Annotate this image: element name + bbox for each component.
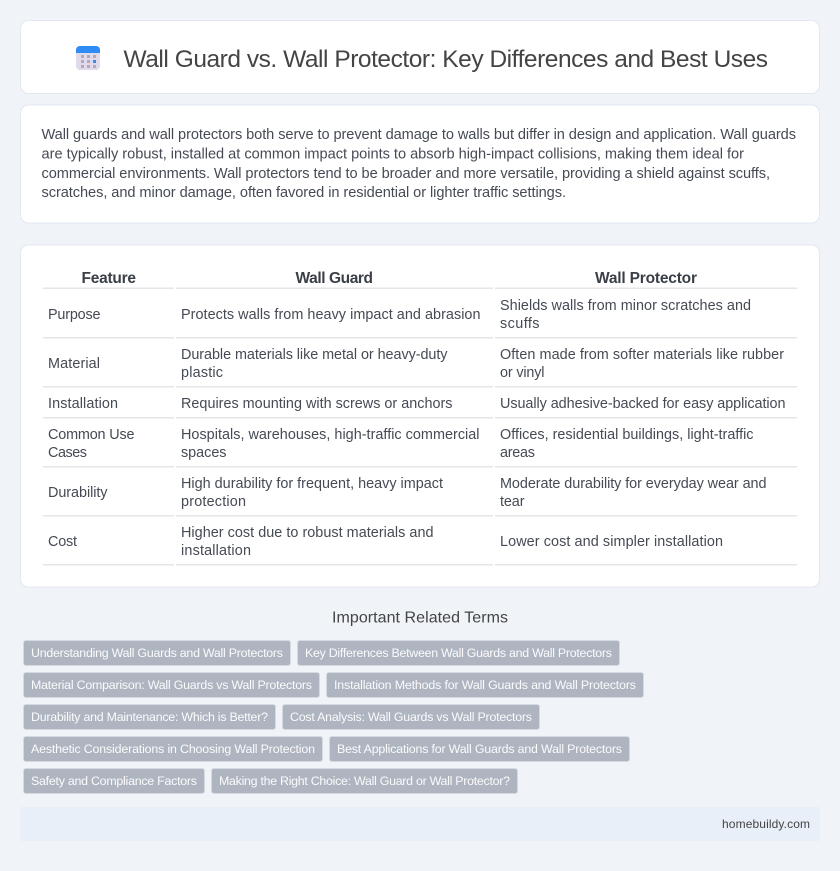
table header: Wall Protector bbox=[595, 270, 697, 287]
row: durability: tear bbox=[500, 494, 525, 510]
intro text: are typically robust, installed at common impact points to absorb high-impact collisions, making them ideal for bbox=[42, 146, 744, 162]
row: cost: Higher cost due to robust materials and bbox=[181, 525, 434, 541]
row: common use cases: areas bbox=[500, 445, 535, 461]
row: installation bbox=[48, 396, 786, 412]
row: common use cases bbox=[48, 427, 754, 461]
tag bbox=[330, 736, 630, 762]
related term tags bbox=[24, 640, 644, 794]
tag bbox=[282, 704, 540, 730]
row: material: Material bbox=[48, 356, 100, 372]
tag bbox=[24, 640, 290, 666]
tag bbox=[212, 768, 518, 794]
tag bbox=[298, 640, 620, 666]
row: durability: protection bbox=[181, 494, 246, 510]
heading: important related terms: Important Related Terms bbox=[332, 610, 508, 626]
icon: calendar bbox=[76, 46, 100, 70]
footer: homebuildy.com bbox=[722, 817, 810, 831]
row: purpose: Purpose bbox=[48, 307, 100, 323]
tag: Aesthetic Considerations in Choosing Wall Protection bbox=[31, 742, 315, 756]
intro text bbox=[42, 127, 796, 201]
row: purpose: scuffs bbox=[500, 316, 540, 332]
row: durability: High durability for frequent, heavy impact bbox=[181, 476, 443, 492]
table header: Wall Guard bbox=[296, 270, 373, 287]
row: material: Durable materials like metal or heavy-duty bbox=[181, 347, 448, 363]
row: common use cases: Hospitals, warehouses, high-traffic commercial bbox=[181, 427, 480, 443]
row: material: or vinyl bbox=[500, 365, 544, 381]
tag: Making the Right Choice: Wall Guard or Wall Protector? bbox=[219, 774, 510, 788]
tag: Key Differences Between Wall Guards and Wall Protectors bbox=[305, 646, 612, 660]
tag: Durability and Maintenance: Which is Better? bbox=[31, 710, 268, 724]
row: cost: Lower cost and simpler installation bbox=[500, 534, 723, 550]
tag: Understanding Wall Guards and Wall Protectors bbox=[31, 646, 283, 660]
row: purpose bbox=[48, 298, 751, 332]
table header: Feature bbox=[82, 270, 136, 287]
tag bbox=[24, 704, 276, 730]
row: durability bbox=[48, 476, 766, 510]
table header bbox=[82, 270, 697, 287]
tag bbox=[24, 768, 204, 794]
row: purpose: Shields walls from minor scratches and bbox=[500, 298, 751, 314]
tag bbox=[326, 672, 644, 698]
row: common use cases: Cases bbox=[48, 445, 87, 461]
row: durability: Moderate durability for everyday wear and bbox=[500, 476, 766, 492]
intro text: Wall guards and wall protectors both serve to prevent damage to walls but differ in design and application. Wall guards bbox=[42, 127, 796, 143]
row: purpose: Protects walls from heavy impact and abrasion bbox=[181, 307, 480, 323]
intro text: commercial environments. Wall protectors tend to be broader and more versatile, providing a shield against scuffs, bbox=[42, 166, 770, 182]
row: material: plastic bbox=[181, 365, 223, 381]
tag bbox=[24, 736, 322, 762]
row: installation: Usually adhesive-backed for easy application bbox=[500, 396, 786, 412]
panel: comparison table bbox=[20, 245, 820, 587]
row: material bbox=[48, 347, 784, 381]
title: Wall Guard vs. Wall Protector: Key Differences and Best Uses bbox=[124, 46, 768, 73]
tag: Cost Analysis: Wall Guards vs Wall Protectors bbox=[290, 710, 532, 724]
panel: header bbox=[20, 20, 820, 94]
footer bbox=[20, 807, 820, 841]
tag: Safety and Compliance Factors bbox=[31, 774, 197, 788]
row: installation: Requires mounting with screws or anchors bbox=[181, 396, 452, 412]
row: cost bbox=[48, 525, 723, 559]
intro text: scratches, and minor damage, often favored in residential or lighter traffic settings. bbox=[42, 185, 566, 201]
tag bbox=[24, 672, 320, 698]
row: material: Often made from softer materials like rubber bbox=[500, 347, 784, 363]
row: cost: Cost bbox=[48, 534, 77, 550]
row: common use cases: Offices, residential buildings, light-traffic bbox=[500, 427, 754, 443]
tag: Material Comparison: Wall Guards vs Wall Protectors bbox=[31, 678, 312, 692]
row: durability: Durability bbox=[48, 485, 108, 501]
panel: introduction bbox=[20, 105, 820, 223]
table rules bbox=[43, 288, 797, 566]
row: common use cases: spaces bbox=[181, 445, 226, 461]
tag: Best Applications for Wall Guards and Wall Protectors bbox=[337, 742, 622, 756]
row: installation: Installation bbox=[48, 396, 118, 412]
row: common use cases: Common Use bbox=[48, 427, 134, 443]
row: cost: installation bbox=[181, 543, 251, 559]
tag: Installation Methods for Wall Guards and Wall Protectors bbox=[334, 678, 636, 692]
